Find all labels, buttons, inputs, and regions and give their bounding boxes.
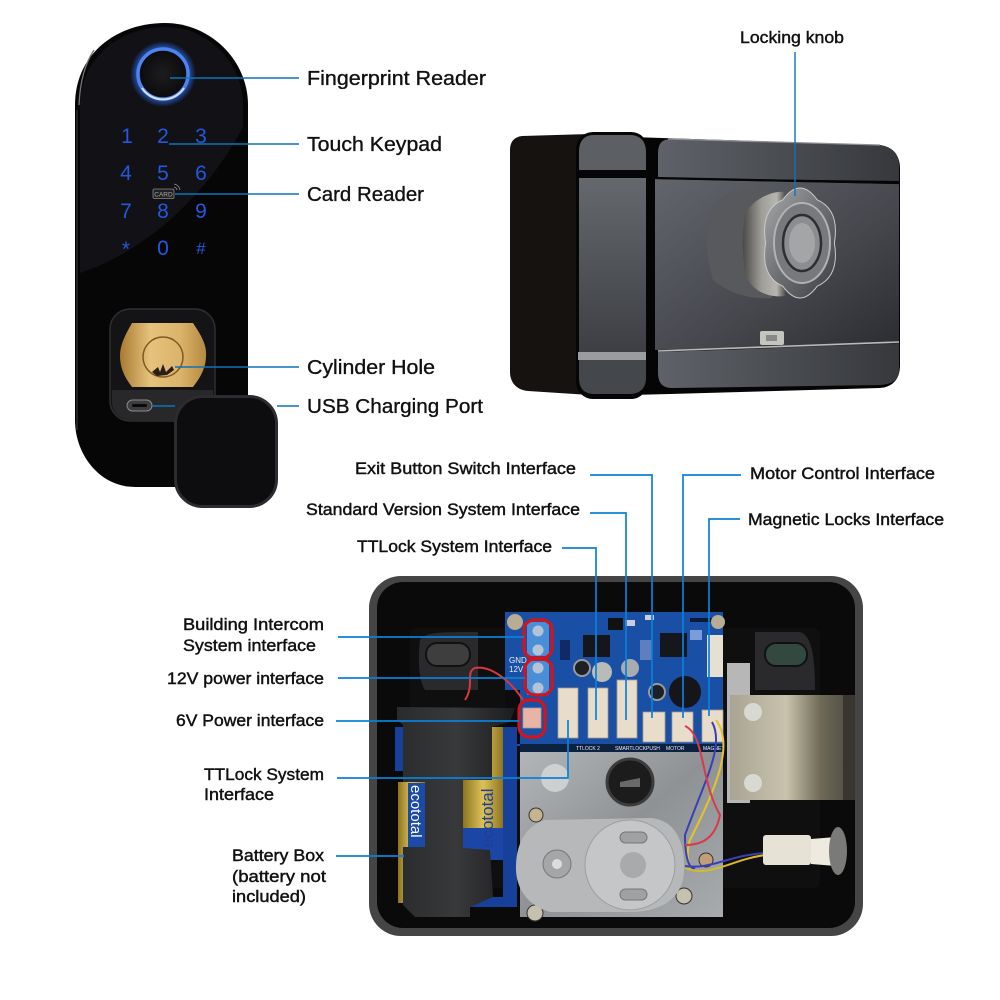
smart lock front panel <box>75 23 276 506</box>
label: Building Intercom System interface: System interface <box>183 636 316 655</box>
rim lock body <box>510 132 900 399</box>
circuit board: 12V <box>509 665 524 674</box>
locking knob <box>707 188 835 298</box>
USB port <box>127 400 152 411</box>
label: TTLock System Interface left: Interface <box>204 785 274 804</box>
label: Fingerprint Reader: Fingerprint Reader <box>307 68 486 90</box>
circuit board: MOTOR <box>666 746 685 752</box>
bolt latch <box>727 663 855 803</box>
open lock interior <box>369 576 863 936</box>
circuit board: PUSH <box>646 746 660 752</box>
label: Cylinder Hole: Cylinder Hole <box>307 357 435 379</box>
label: Building Intercom System interface: Building Intercom <box>183 615 324 634</box>
label: Battery Box <box>232 846 404 906</box>
touch keypad digits: 7 <box>120 200 132 223</box>
label: Magnetic Locks Interface: Magnetic Locks Interface <box>748 510 944 529</box>
circuit board <box>505 612 725 752</box>
exit button socket <box>763 827 847 875</box>
main faceplate <box>655 139 899 388</box>
housing <box>369 576 863 936</box>
label: Locking knob: Locking knob <box>740 28 844 47</box>
label: Magnetic Locks Interface <box>709 510 944 716</box>
mounting slots <box>419 632 815 690</box>
label: USB Charging Port: USB Charging Port <box>307 396 483 418</box>
battery box: ecototal <box>478 788 497 848</box>
touch keypad digits: * <box>122 238 130 261</box>
cover knob <box>176 396 276 506</box>
glossy reflection <box>80 27 243 273</box>
white connectors <box>523 680 723 742</box>
fingerprint sensor <box>130 41 196 107</box>
touch keypad digits: 0 <box>157 237 169 260</box>
card reader mark: CARD <box>154 192 173 198</box>
label: Battery Box: (battery not <box>232 867 326 886</box>
touch keypad digits: # <box>196 239 206 258</box>
label: Motor Control Interface <box>683 464 935 718</box>
battery box: ecototal <box>407 785 424 838</box>
label: Standard Version System Interface <box>306 500 626 720</box>
label: Battery Box: included) <box>232 887 306 906</box>
circuit board: TTLOCK 2 <box>576 746 600 752</box>
gearbox plate <box>520 745 723 921</box>
touch keypad digits: 1 <box>121 125 133 148</box>
touch keypad digits: 2 <box>157 125 169 148</box>
terminal blocks <box>527 622 549 695</box>
touch keypad digits: 6 <box>195 162 207 185</box>
label: 12V power interface: 12V power interface <box>167 669 324 688</box>
panel body <box>75 23 248 487</box>
label: 6V Power interface: 6V Power interface <box>176 711 324 730</box>
label: Standard Version System Interface: Standard Version System Interface <box>306 500 580 519</box>
touch keypad digits: 8 <box>157 200 169 223</box>
touch keypad digits <box>120 125 207 261</box>
label: Battery Box: Battery Box <box>232 846 325 865</box>
motor gearbox <box>516 818 684 912</box>
label: TTLock System Interface top: TTLock System Interface <box>357 537 552 556</box>
label: TTLock System Interface top <box>357 537 596 720</box>
touch keypad digits: 4 <box>120 162 132 185</box>
label: Building Intercom System interface <box>183 615 524 655</box>
cylinder bay <box>110 309 215 421</box>
label: Motor Control Interface: Motor Control Interface <box>750 464 935 483</box>
touch keypad digits: 3 <box>195 125 207 148</box>
label: TTLock System Interface left: TTLock System <box>204 765 324 784</box>
card reader mark <box>153 184 180 198</box>
battery box <box>395 707 517 917</box>
label: Exit Button Switch Interface <box>355 459 652 718</box>
touch keypad digits: 5 <box>157 162 169 185</box>
label: Exit Button Switch Interface: Exit Button Switch Interface <box>355 459 576 478</box>
side block <box>510 134 590 395</box>
circuit board: MAGNET <box>703 746 724 752</box>
wires <box>465 668 765 871</box>
label: Card Reader: Card Reader <box>307 184 424 206</box>
red highlights <box>519 620 552 737</box>
label: Touch Keypad: Touch Keypad <box>307 134 442 156</box>
label: TTLock System Interface left <box>204 720 568 804</box>
circuit board: GND <box>509 656 527 665</box>
indicator window <box>760 331 784 345</box>
left strike plate <box>576 132 648 399</box>
touch keypad digits: 9 <box>195 200 207 223</box>
circuit board: SMARTLOCK <box>615 746 647 752</box>
brass cylinder <box>120 323 206 387</box>
